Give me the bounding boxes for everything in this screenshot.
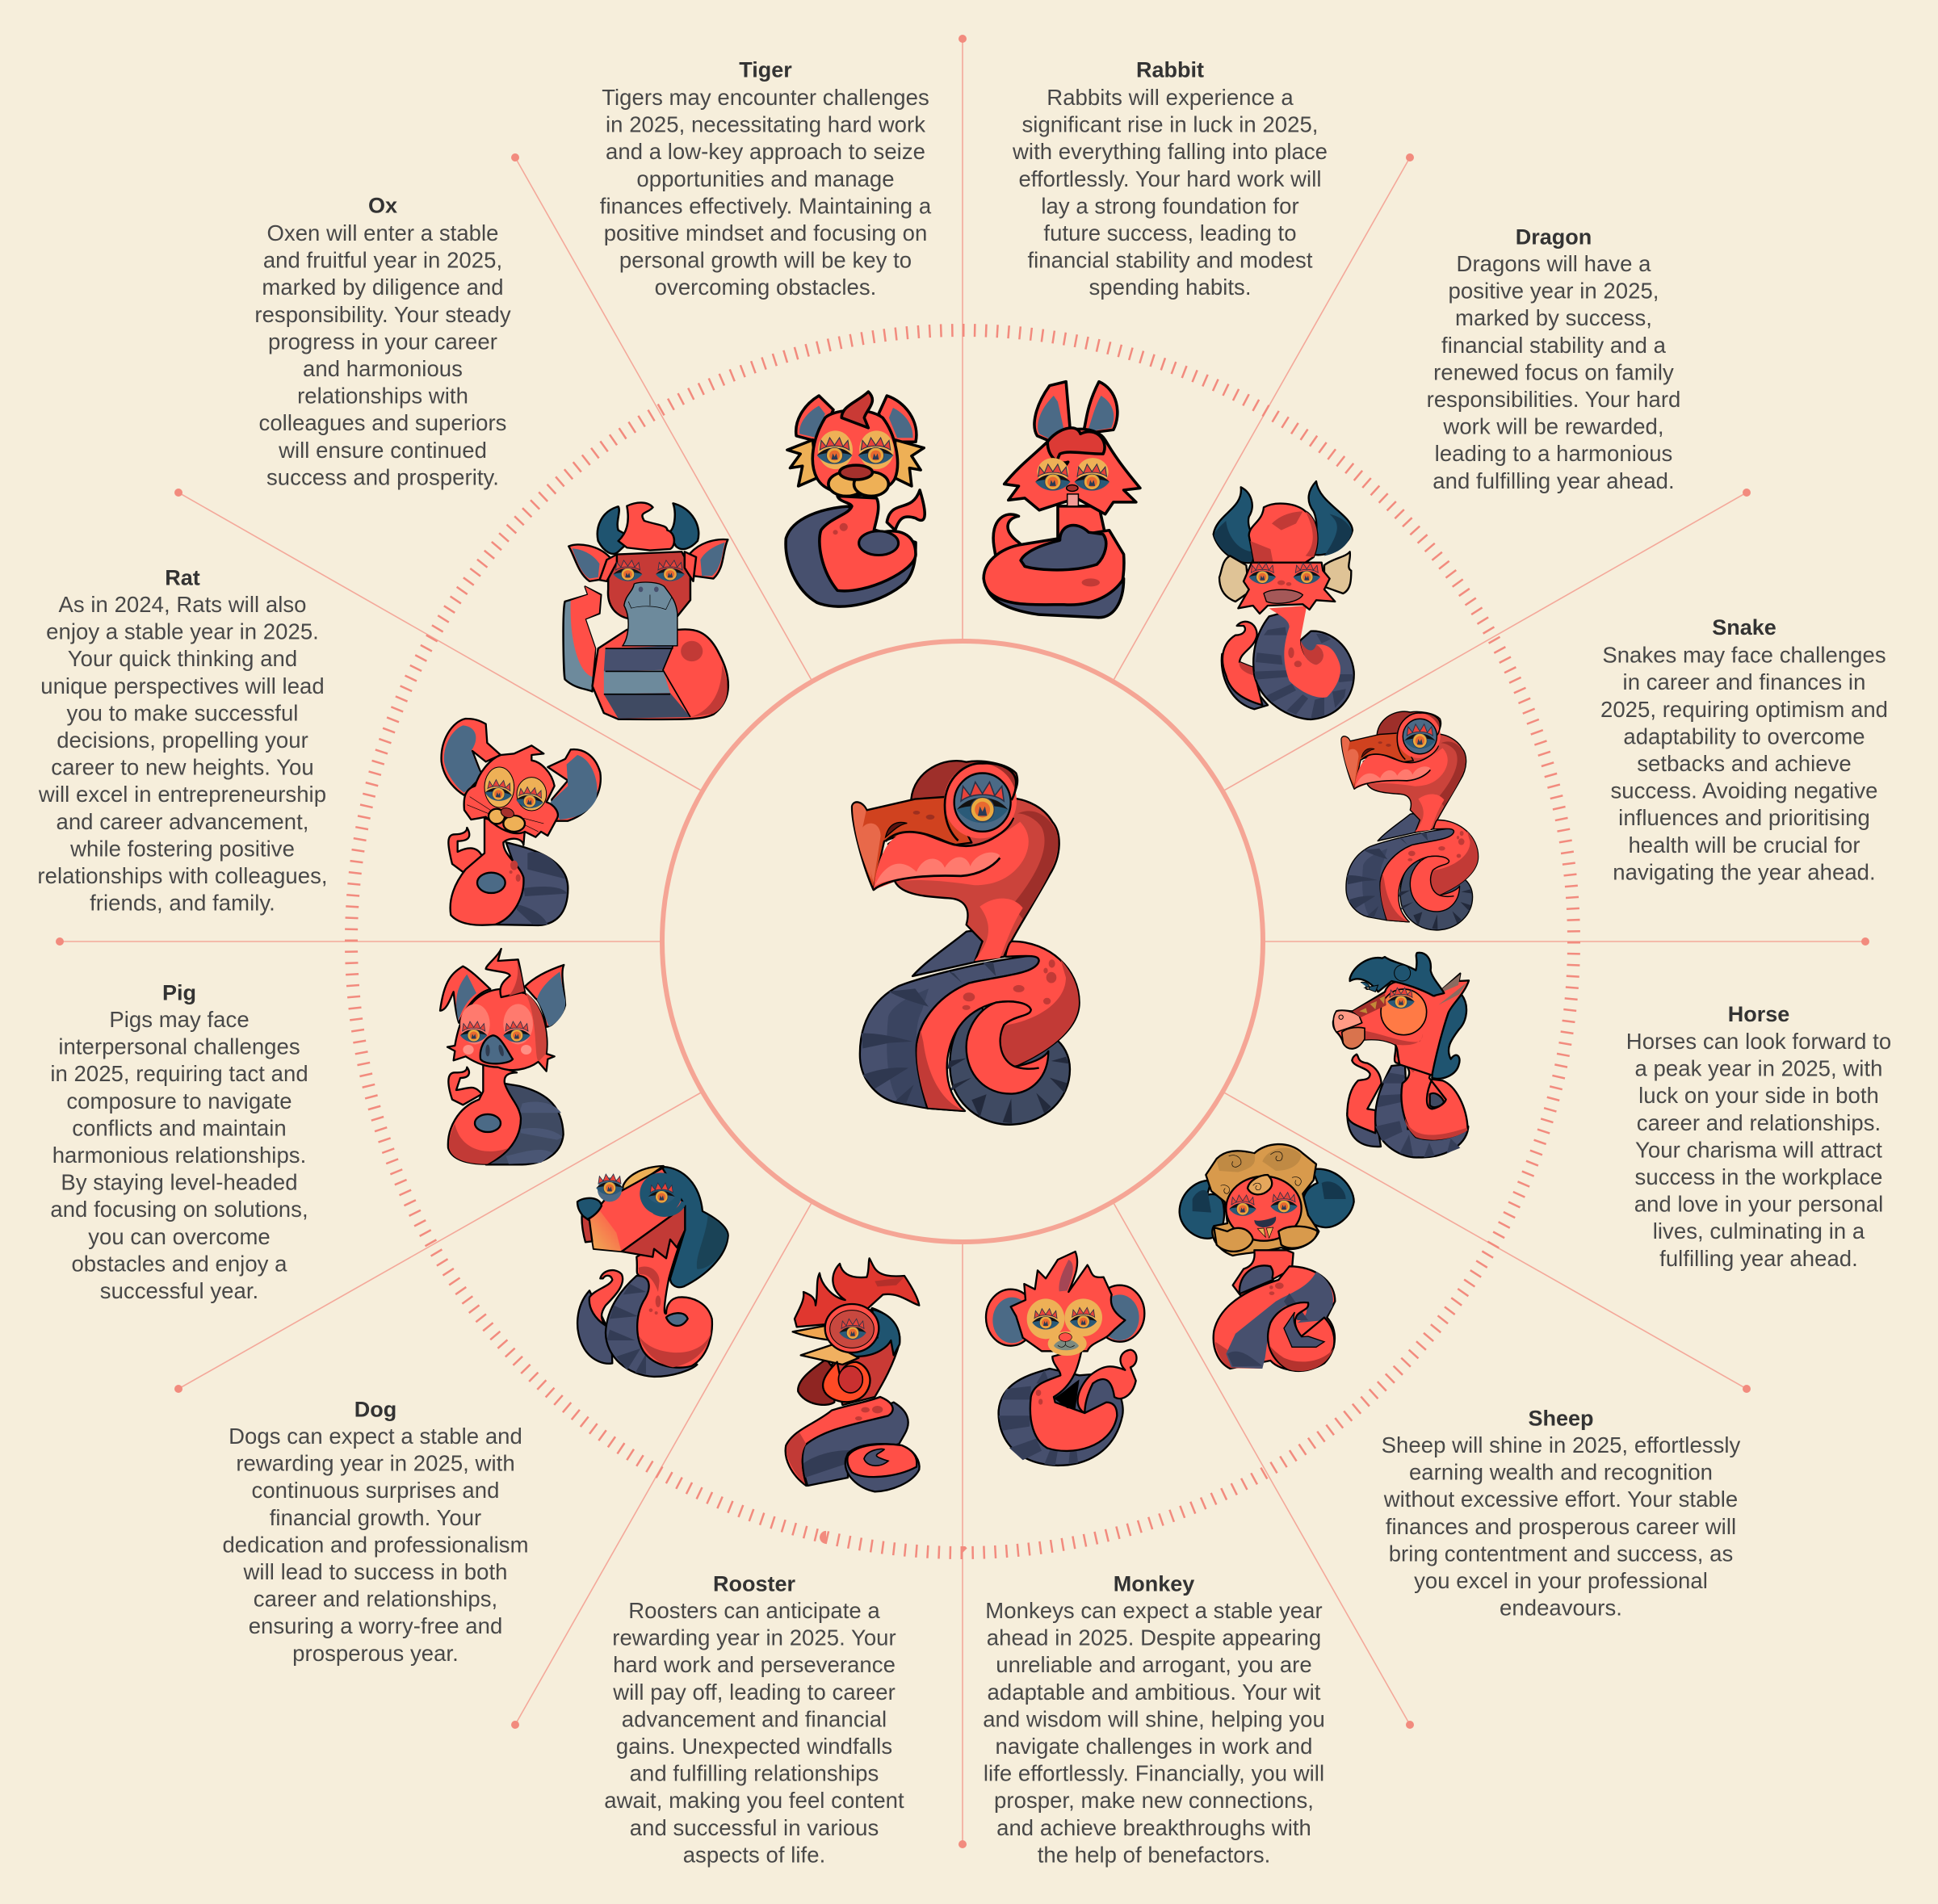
text: rooster: and successful in various: [630, 1815, 879, 1840]
text: rooster: [604, 1571, 904, 1867]
text: monkey: life effortlessly. Financially, you will: [984, 1761, 1324, 1786]
text: pig: By staying level-headed: [61, 1170, 298, 1195]
text: rat: while fostering positive: [69, 836, 295, 861]
text: dog: financial growth. Your: [270, 1505, 481, 1530]
text: rat: decisions, propelling your: [57, 728, 308, 753]
text: sheep: Sheep: [1528, 1407, 1594, 1431]
text: dog: career and relationships,: [254, 1587, 497, 1612]
text: tiger: opportunities and manage: [636, 166, 895, 191]
text: rooster: and fulfilling relationships: [630, 1761, 879, 1786]
text: dog: Dog: [354, 1397, 396, 1421]
icon: main snake: [852, 761, 1080, 1125]
text: rooster: aspects of life.: [683, 1842, 825, 1867]
text: sheep: finances and prosperous career will: [1386, 1514, 1736, 1539]
text: tiger: [600, 58, 932, 300]
text: tiger: finances effectively. Maintaining a: [600, 193, 932, 218]
text: rabbit: financial stability and modest: [1027, 248, 1313, 273]
text: sheep: bring contentment and success, as: [1389, 1541, 1733, 1566]
text: pig: Pigs may face: [109, 1007, 250, 1032]
text: rat: Your quick thinking and: [68, 646, 297, 671]
icon: dog: [577, 1166, 728, 1377]
text: rooster: Rooster: [713, 1571, 795, 1596]
text: snake: [1600, 615, 1888, 884]
text: dragon: renewed focus on family: [1433, 359, 1674, 384]
text: rabbit: spending habits.: [1089, 275, 1252, 300]
text: rabbit: Rabbit: [1136, 58, 1204, 82]
text: monkey: Monkeys can expect a stable year: [985, 1598, 1323, 1623]
text: dog: continuous surprises and: [252, 1478, 499, 1503]
text: rat: As in 2024, Rats will also: [58, 592, 307, 617]
text: sheep: without excessive effort. Your stable: [1383, 1487, 1738, 1512]
text: rat: [37, 565, 328, 916]
text: horse: fulfilling year ahead.: [1659, 1246, 1858, 1271]
text: snake: setbacks and achieve: [1637, 751, 1852, 776]
text: horse: a peak year in 2025, with: [1634, 1056, 1883, 1081]
text: rat: relationships with colleagues,: [37, 863, 328, 888]
text: rooster: Roosters can anticipate a: [628, 1598, 880, 1623]
text: horse: career and relationships.: [1637, 1110, 1881, 1135]
icon: monkey: [986, 1252, 1144, 1466]
text: snake: Snakes may face challenges: [1602, 643, 1886, 668]
text: horse: lives, culminating in a: [1653, 1218, 1865, 1243]
text: snake: 2025, requiring optimism and: [1600, 697, 1888, 722]
text: tiger: Tigers may encounter challenges: [602, 85, 929, 110]
text: rabbit: future success, leading to: [1043, 220, 1297, 245]
text: horse: Horses can look forward to: [1626, 1029, 1891, 1054]
text: rooster: advancement and financial: [622, 1706, 887, 1731]
text: tiger: and a low-key approach to seize: [606, 139, 925, 164]
text: pig: in 2025, requiring tact and: [50, 1061, 308, 1086]
text: pig: and focusing on solutions,: [50, 1197, 308, 1222]
icon: ox: [564, 502, 728, 719]
text: dog: prosperous year.: [292, 1641, 459, 1666]
text: rat: will excel in entrepreneurship: [38, 782, 326, 807]
icon: rat: [442, 719, 601, 925]
text: pig: obstacles and enjoy a: [71, 1251, 287, 1276]
text: dragon: [1427, 224, 1680, 493]
text: snake: success. Avoiding negative: [1610, 778, 1878, 803]
text: ox: relationships with: [297, 384, 468, 409]
icon: horse: [1333, 953, 1469, 1157]
icon: pig: [440, 949, 565, 1164]
text: pig: conflicts and maintain: [72, 1115, 287, 1140]
text: monkey: ahead in 2025. Despite appearing: [987, 1625, 1321, 1650]
text: rat: you to make successful: [67, 700, 298, 725]
text: dog: Dogs can expect a stable and: [229, 1424, 522, 1449]
text: ox: responsibility. Your steady: [254, 302, 511, 327]
text: dog: dedication and professionalism: [222, 1532, 529, 1557]
icon: small snake: [1341, 711, 1479, 930]
text: monkey: Monkey: [1114, 1571, 1194, 1596]
text: ox: and fruitful year in 2025,: [263, 248, 502, 273]
text: ox: Oxen will enter a stable: [266, 220, 499, 245]
text: pig: Pig: [162, 980, 196, 1004]
text: dog: rewarding year in 2025, with: [236, 1451, 515, 1476]
text: rooster: rewarding year in 2025. Your: [612, 1625, 896, 1650]
text: tiger: positive mindset and focusing on: [604, 220, 927, 245]
text: horse: Horse: [1728, 1002, 1789, 1026]
text: ox: colleagues and superiors: [259, 410, 506, 435]
text: sheep: you excel in your professional: [1414, 1568, 1708, 1593]
text: dog: ensuring a worry-free and: [249, 1613, 502, 1638]
icon: tiger: [786, 392, 925, 606]
text: rat: Rat: [165, 565, 200, 589]
text: rabbit: [1012, 58, 1328, 300]
text: pig: composure to navigate: [66, 1088, 292, 1113]
icon: rooster: [786, 1258, 920, 1491]
text: monkey: navigate challenges in work and: [996, 1734, 1312, 1759]
text: rooster: will pay off, leading to career: [612, 1680, 896, 1705]
text: tiger: Tiger: [739, 58, 792, 82]
text: sheep: endeavours.: [1500, 1596, 1622, 1621]
text: snake: influences and prioritising: [1618, 805, 1870, 830]
text: pig: [50, 980, 308, 1303]
text: rooster: gains. Unexpected windfalls: [616, 1734, 892, 1759]
text: sheep: earning wealth and recognition: [1409, 1460, 1713, 1485]
icon: dragon: [1214, 481, 1354, 719]
text: dragon: leading to a harmonious: [1435, 441, 1672, 466]
text: dragon: work will be rewarded,: [1442, 414, 1664, 439]
text: dragon: positive year in 2025,: [1449, 279, 1659, 304]
text: monkey: the help of benefactors.: [1038, 1842, 1270, 1867]
text: ox: marked by diligence and: [262, 275, 504, 300]
text: rat: friends, and family.: [90, 891, 275, 916]
tick ring: [351, 330, 1574, 1553]
text: monkey: adaptable and ambitious. Your wit: [988, 1680, 1321, 1705]
text: ox: [254, 194, 511, 489]
text: dragon: responsibilities. Your hard: [1427, 387, 1680, 412]
text: dragon: Dragons will have a: [1457, 251, 1651, 276]
text: sheep: [1382, 1407, 1741, 1621]
text: pig: harmonious relationships.: [52, 1143, 306, 1168]
text: horse: [1626, 1002, 1891, 1271]
text: rabbit: effortlessly. Your hard work will: [1018, 166, 1322, 191]
text: monkey: prosper, make new connections,: [994, 1788, 1314, 1813]
text: sheep: Sheep will shine in 2025, effortlessly: [1382, 1432, 1740, 1457]
text: pig: interpersonal challenges: [58, 1034, 300, 1059]
text: ox: Ox: [368, 194, 397, 218]
central circle: [662, 641, 1263, 1242]
text: pig: successful year.: [100, 1278, 258, 1303]
text: tiger: overcoming obstacles.: [655, 275, 876, 300]
text: rat: and career advancement,: [56, 809, 309, 834]
icon: sheep: [1180, 1144, 1354, 1371]
text: snake: navigating the year ahead.: [1613, 859, 1876, 884]
text: monkey: and wisdom will shine, helping you: [983, 1706, 1325, 1731]
text: rooster: await, making you feel content: [604, 1788, 904, 1813]
text: ox: progress in your career: [268, 329, 497, 354]
text: horse: luck on your side in both: [1638, 1083, 1879, 1108]
text: ox: success and prosperity.: [266, 464, 499, 489]
text: horse: success in the workplace: [1635, 1164, 1882, 1189]
text: rabbit: with everything falling into place: [1012, 139, 1328, 164]
text: rabbit: significant rise in luck in 2025,: [1022, 112, 1318, 137]
text: ox: will ensure continued: [278, 438, 487, 463]
text: dragon: financial stability and a: [1441, 333, 1667, 358]
text: dragon: Dragon: [1516, 224, 1592, 249]
text: horse: and love in your personal: [1634, 1192, 1883, 1217]
text: dog: will lead to success in both: [243, 1559, 507, 1584]
text: monkey: unreliable and arrogant, you are: [996, 1652, 1312, 1677]
text: monkey: and achieve breakthroughs with: [996, 1815, 1311, 1840]
text: rooster: hard work and perseverance: [613, 1652, 896, 1677]
text: tiger: in 2025, necessitating hard work: [606, 112, 925, 137]
text: rat: unique perspectives will lead: [40, 673, 325, 698]
text: horse: Your charisma will attract: [1635, 1137, 1882, 1162]
text: rat: enjoy a stable year in 2025.: [46, 619, 319, 644]
text: snake: health will be crucial for: [1628, 832, 1860, 858]
text: tiger: personal growth will be key to: [619, 248, 912, 273]
text: dragon: marked by success,: [1455, 305, 1652, 330]
text: ox: and harmonious: [303, 356, 463, 381]
text: rabbit: Rabbits will experience a: [1047, 85, 1294, 110]
text: snake: in career and finances in: [1623, 669, 1865, 694]
text: monkey: [983, 1571, 1325, 1867]
text: dog: [222, 1397, 529, 1666]
text: rat: career to new heights. You: [51, 755, 314, 780]
text: snake: Snake: [1712, 615, 1776, 640]
text: dragon: and fulfilling year ahead.: [1433, 468, 1675, 493]
text: snake: adaptability to overcome: [1623, 723, 1865, 749]
text: pig: you can overcome: [88, 1224, 271, 1249]
text: rabbit: lay a strong foundation for: [1041, 193, 1299, 218]
icon: rabbit: [984, 382, 1140, 618]
